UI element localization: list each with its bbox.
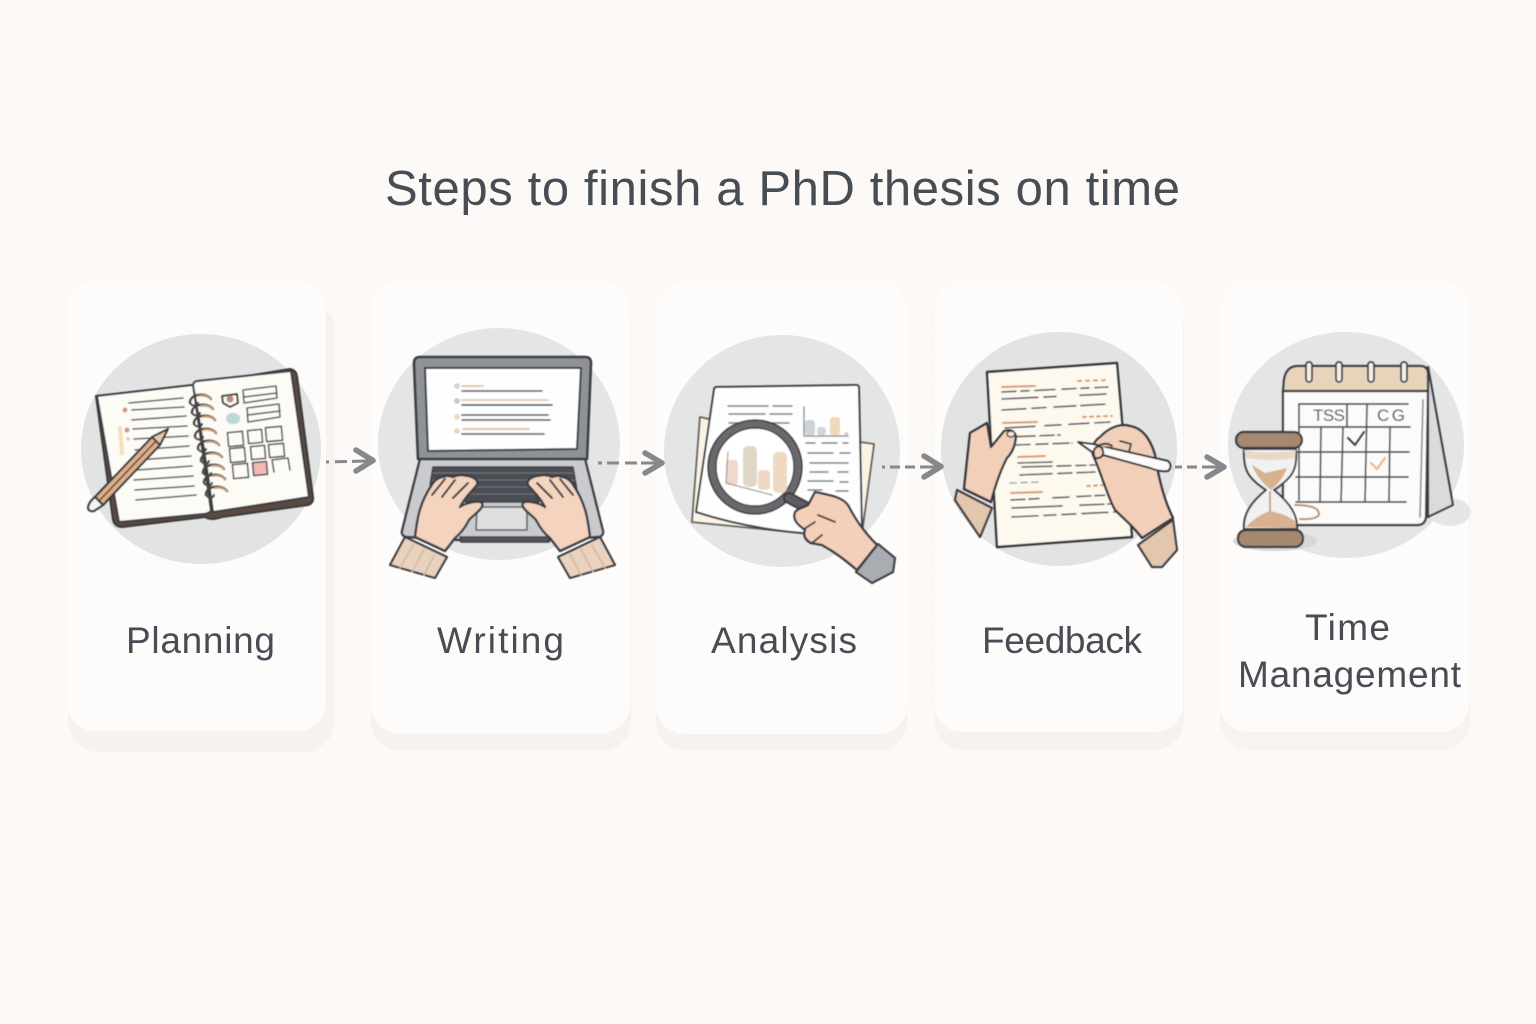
calendar header letters: TSS	[1313, 406, 1345, 425]
panel: analysis	[656, 282, 907, 751]
left hand and cuff	[390, 475, 482, 578]
arrow: analysis to feedback	[882, 456, 941, 477]
panel: writing	[371, 282, 631, 751]
label: Analysis: Analysis	[711, 620, 857, 661]
icon backdrop: analysis circle	[664, 335, 900, 567]
label: Writing: Writing	[437, 620, 564, 661]
icon: documents with magnifying glass and hand	[692, 385, 895, 583]
label: Time Management: Management	[1238, 654, 1462, 695]
panel: planning	[67, 282, 335, 752]
icon: open spiral notebook with pencil	[88, 369, 313, 527]
label: Time Management	[1238, 607, 1462, 695]
icon backdrop: time management circle	[1228, 332, 1464, 558]
icon: calendar and hourglass	[1233, 362, 1471, 551]
icon: laptop with typing hands	[390, 357, 615, 578]
arrow: planning to writing	[326, 450, 373, 471]
label: Planning: Planning	[126, 620, 275, 661]
icon backdrop: planning circle	[81, 334, 321, 564]
calendar header letters right: C G	[1377, 406, 1405, 425]
arrow: feedback to time management	[1175, 457, 1224, 477]
panel: time management	[1220, 282, 1471, 750]
icon backdrop: writing circle	[378, 328, 620, 560]
right hand and cuff	[523, 475, 615, 578]
arrow: writing to analysis	[598, 453, 662, 473]
title: Steps to finish a PhD thesis on time	[385, 162, 1180, 216]
label: Feedback: Feedback	[982, 620, 1142, 661]
icon: marked-up paper with hands and pen	[955, 363, 1177, 567]
panel: feedback	[934, 282, 1184, 750]
label: Time Management: Time	[1305, 607, 1390, 648]
icon backdrop: feedback blob	[941, 332, 1177, 566]
